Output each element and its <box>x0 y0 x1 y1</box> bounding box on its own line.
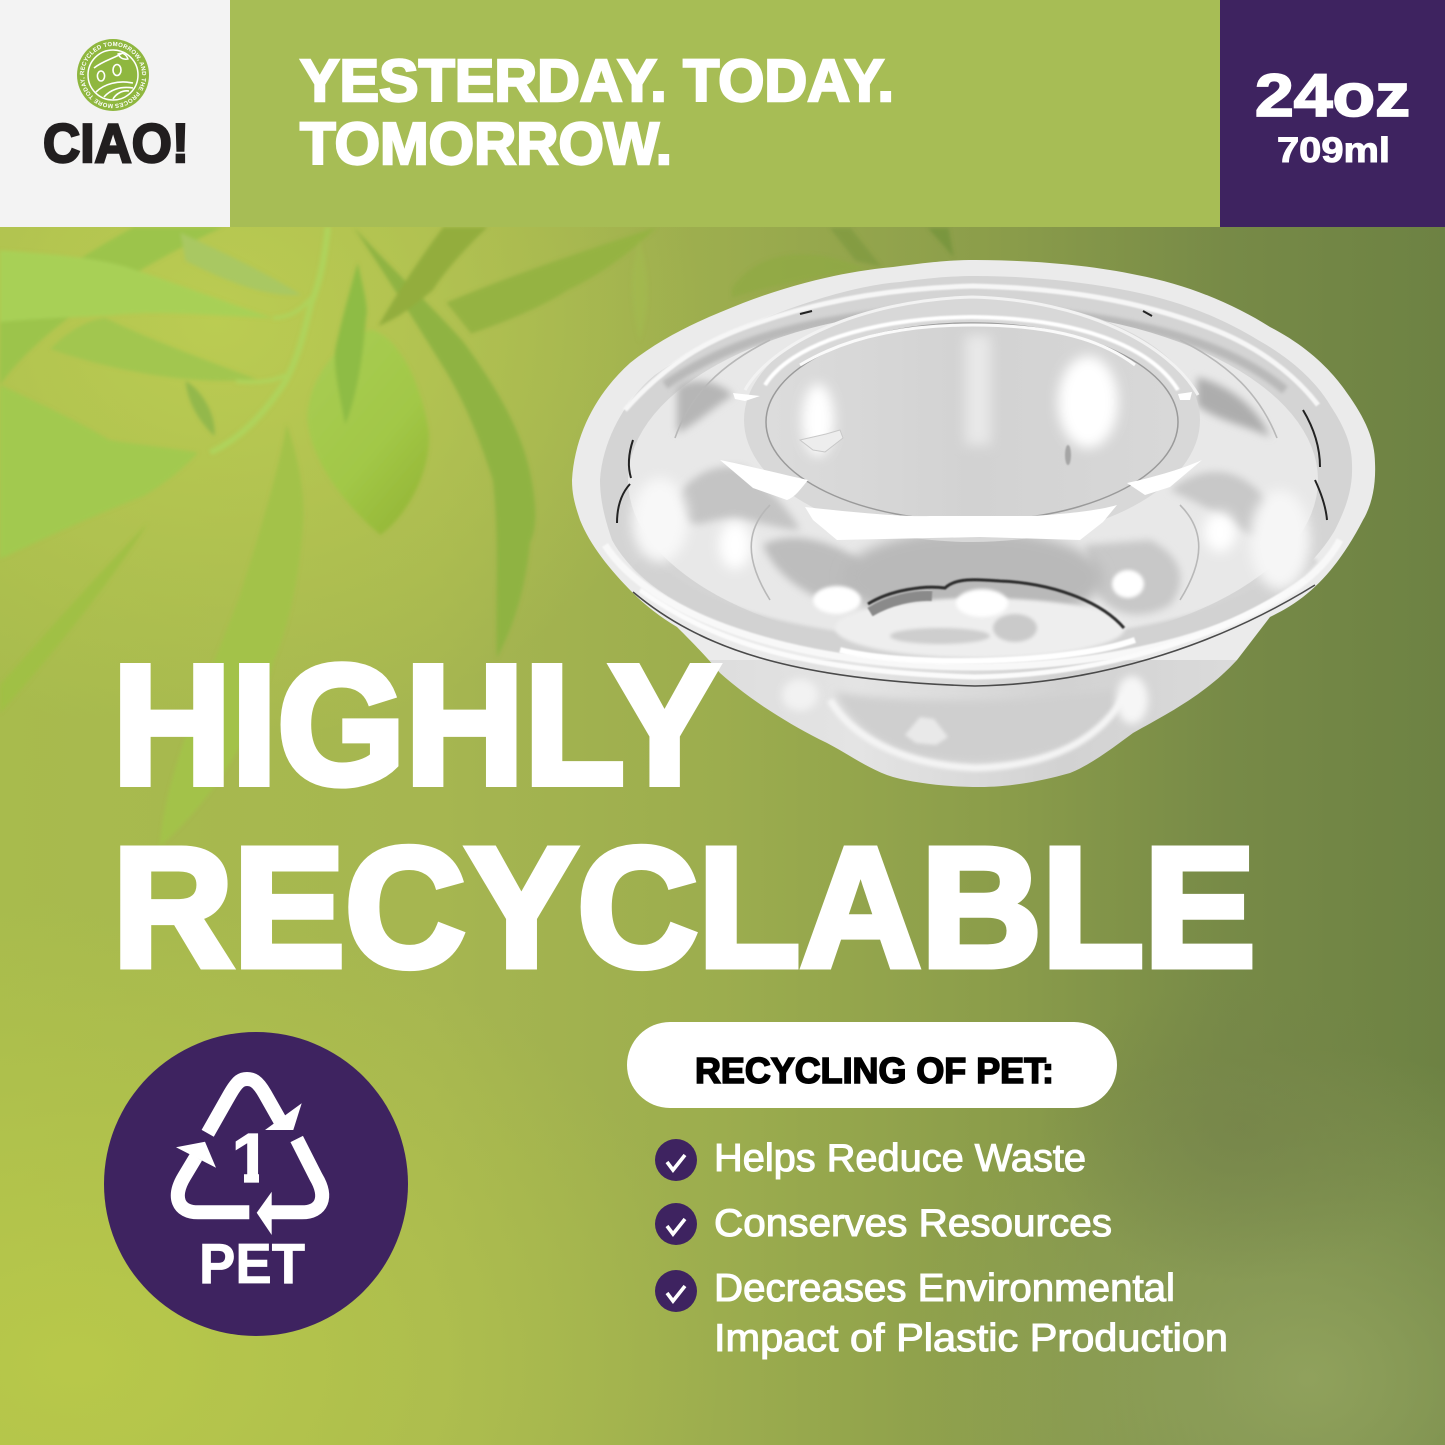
center well <box>854 538 1102 609</box>
bowl interior <box>628 322 1318 630</box>
item: conserves resources: Conserves Resources <box>714 1202 1112 1245</box>
well dark scribble <box>868 580 1124 628</box>
item: helps reduce waste: Helps Reduce Waste <box>714 1137 1086 1180</box>
side lobe shadows <box>675 377 1275 614</box>
slogan text <box>300 48 894 177</box>
item: decreases environmental impact: Decreases Environmental <box>714 1267 1175 1310</box>
number 1: 1 <box>232 1119 270 1197</box>
callout pill: recycling of PET <box>627 1022 1117 1108</box>
dark marks on rim <box>617 311 1327 523</box>
size 709ml: 709ml <box>1277 131 1390 170</box>
white highlights <box>720 392 1202 540</box>
brand name: CIAO! <box>43 112 189 174</box>
header panel: logo <box>0 0 230 227</box>
badge: PET recycling code 1 <box>104 1032 408 1336</box>
lid outer ring <box>600 276 1352 665</box>
header panel: size <box>1220 0 1445 227</box>
heading: highly recyclable: HIGHLY <box>112 630 720 820</box>
callout pill: recycling of PET: RECYCLING OF PET: <box>695 1050 1054 1091</box>
product: clear plastic bowl <box>560 250 1390 795</box>
PET label: PET <box>199 1232 305 1296</box>
top dome <box>744 298 1200 542</box>
item: decreases environmental impact: Impact of Plastic Production <box>714 1317 1228 1360</box>
scalloped lid lines <box>675 340 1277 600</box>
slogan text: YESTERDAY. TODAY. <box>300 48 894 114</box>
size 24oz: 24oz <box>1255 62 1410 129</box>
heading: highly recyclable: RECYCLABLE <box>112 813 1256 1003</box>
header panel: slogan <box>230 0 1220 227</box>
item: decreases environmental impact <box>655 1267 1228 1360</box>
bowl silhouette <box>572 260 1376 660</box>
lobe glows <box>632 478 688 562</box>
benefits list <box>655 1137 1228 1360</box>
icon: olive badge <box>77 39 149 111</box>
heading: highly recyclable <box>112 630 1256 1003</box>
slogan text: TOMORROW. <box>300 111 672 177</box>
bowl body <box>709 660 1237 787</box>
rim bands <box>605 540 1340 686</box>
icon: recycling triangle <box>176 1079 322 1235</box>
